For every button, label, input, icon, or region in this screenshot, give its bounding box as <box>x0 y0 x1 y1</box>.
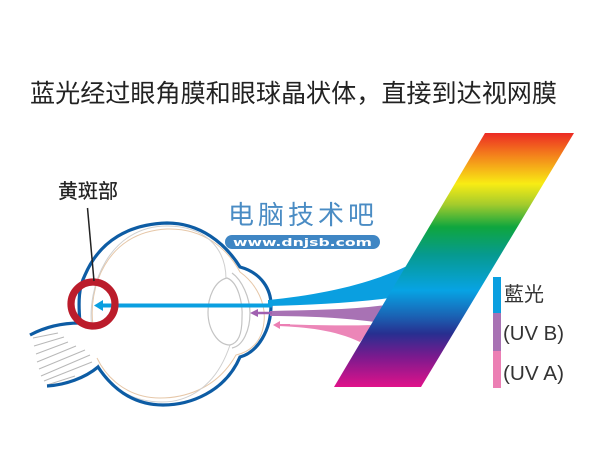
legend labels: (UV A) <box>503 363 564 385</box>
UV B beam <box>270 305 386 322</box>
spectrum prism <box>334 133 574 387</box>
UV A arrow <box>273 321 290 329</box>
macula pointer line <box>88 208 94 281</box>
legend labels <box>503 283 564 385</box>
title: 蓝光经过眼角膜和眼球晶状体，直接到达视网膜 <box>30 80 557 108</box>
legend labels: (UV B) <box>503 323 564 345</box>
label: macula: 黄斑部 <box>58 180 118 203</box>
UV B arrow <box>250 309 272 317</box>
eye outline <box>30 223 271 405</box>
watermark: www.dnjsb.com <box>233 236 372 249</box>
blue light arrow <box>94 300 272 311</box>
eye diagram <box>30 223 271 405</box>
watermark: 电脑技术吧 <box>228 200 378 230</box>
macula highlight circle <box>71 282 115 326</box>
legend colour bar <box>493 277 501 388</box>
blue light beam <box>268 266 407 306</box>
eye inner layers <box>91 226 264 402</box>
optic nerve <box>33 333 92 385</box>
UV A beam <box>278 324 373 342</box>
watermark <box>225 200 380 249</box>
legend labels: 藍光 <box>504 283 544 306</box>
